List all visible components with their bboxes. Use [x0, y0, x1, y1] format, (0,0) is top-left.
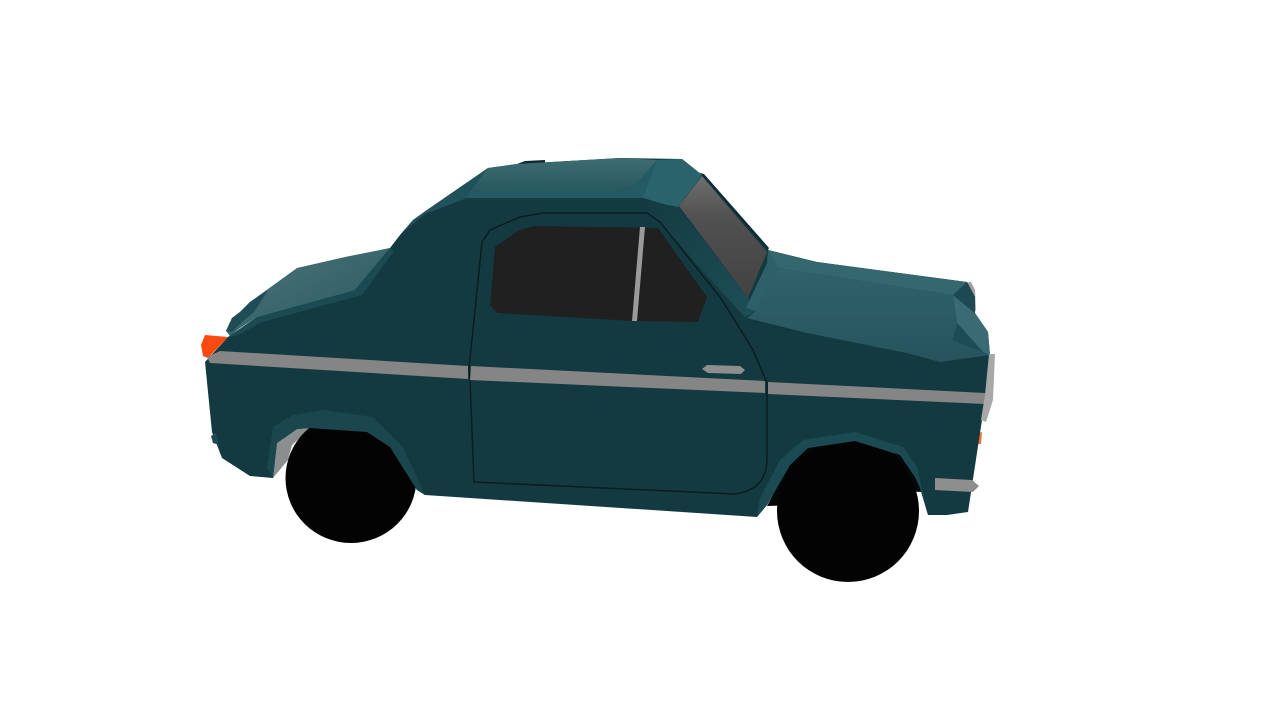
chrome side strip: front [768, 382, 985, 404]
grille recess [953, 282, 975, 313]
rear light [201, 335, 228, 358]
cowl [746, 250, 778, 311]
arch interior: rear grey [273, 427, 312, 478]
car [201, 158, 995, 582]
roof front corner [643, 159, 702, 207]
grille chrome top [964, 282, 976, 312]
hood [747, 250, 990, 362]
rear small bumper [211, 433, 219, 445]
roof top panel [470, 158, 657, 192]
wheel: rear [286, 413, 416, 543]
windscreen [679, 176, 767, 298]
rear wheel arch lip [267, 410, 425, 495]
chrome side strip: rear [207, 351, 468, 379]
wheel: front [777, 440, 919, 582]
chrome side strip: door [470, 366, 765, 393]
trunk lid [226, 248, 390, 336]
door outline [469, 213, 767, 494]
front light [976, 432, 982, 444]
hood nose [953, 295, 990, 355]
trunk edge highlight [228, 248, 394, 337]
door handle [702, 365, 745, 374]
windscreen rear edge [700, 173, 769, 256]
roof [400, 158, 702, 235]
A pillar [643, 198, 756, 317]
front wheel arch lip [757, 432, 928, 517]
hood top strip [768, 250, 967, 295]
arch interior: front [767, 438, 922, 506]
hood nose shadow [953, 323, 983, 352]
front bumper corner [935, 478, 979, 492]
roof band [467, 159, 702, 207]
front bumper upright [981, 354, 995, 422]
window pillar [632, 227, 645, 321]
car body [205, 158, 990, 517]
roof rear sliver [517, 160, 545, 164]
roof rear slope [400, 168, 488, 235]
side window [490, 226, 707, 322]
